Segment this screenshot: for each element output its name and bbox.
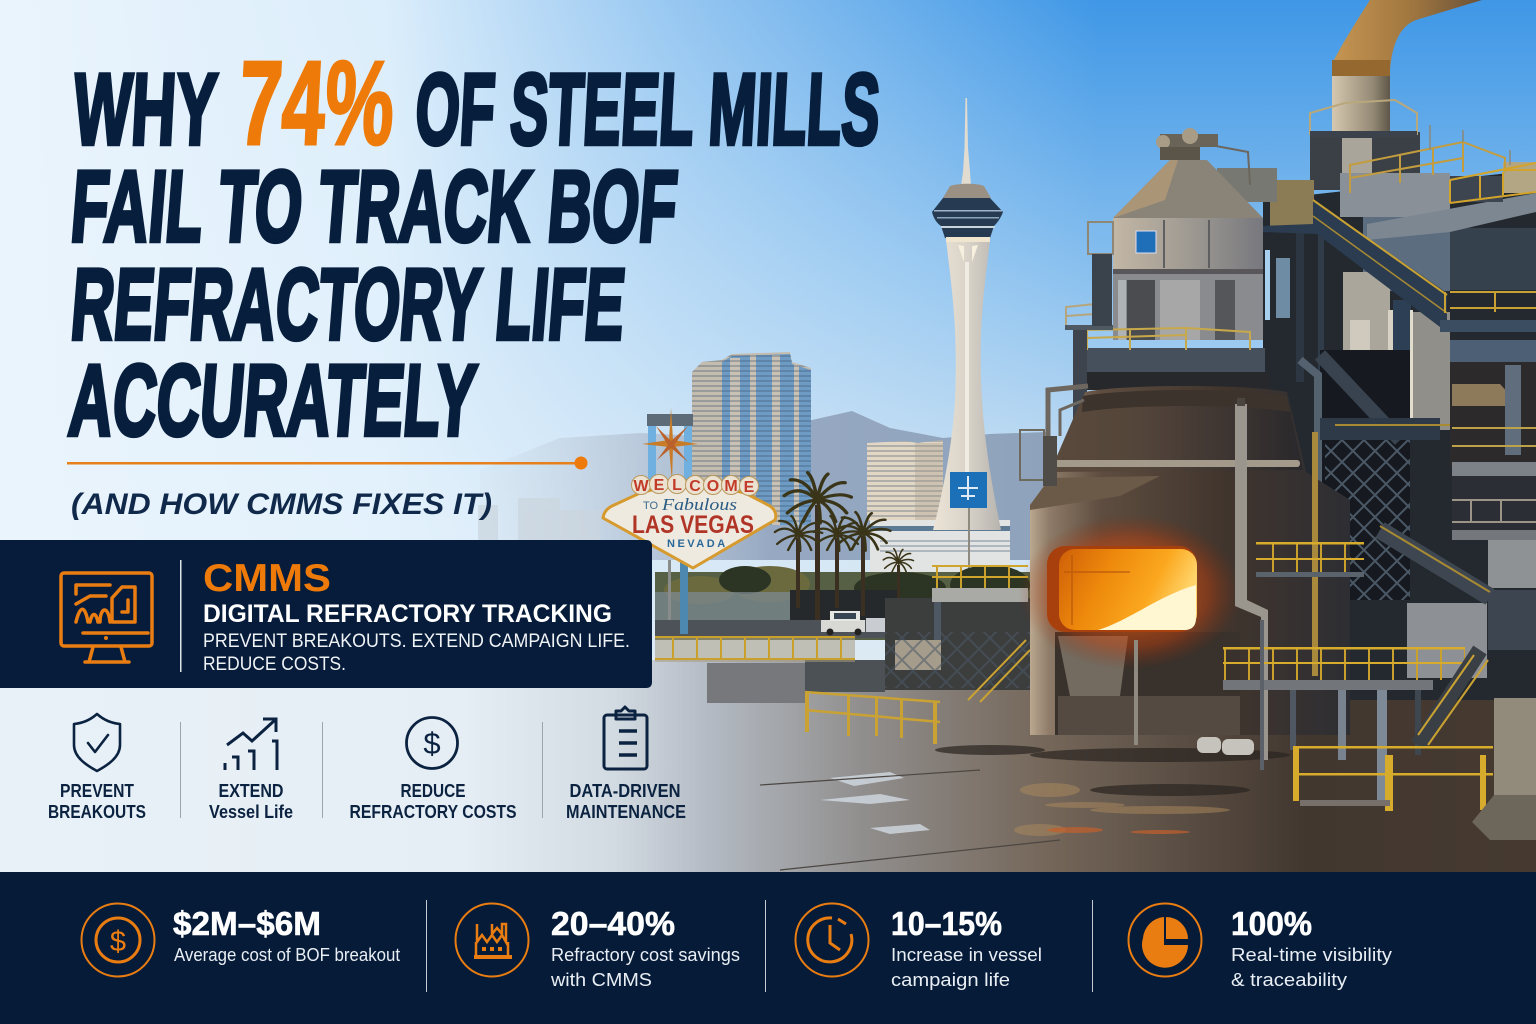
ground [0, 660, 1536, 872]
subtitle: (AND HOW CMMS FIXES IT) [71, 488, 492, 521]
title: WHY [71, 54, 220, 166]
Welcome to Las Vegas sign: M [724, 478, 738, 495]
Stratosphere tower [932, 98, 1003, 530]
dividers [180, 722, 543, 818]
BOF furnace vessel [1018, 386, 1350, 760]
benefit: prevent breakouts [48, 714, 146, 822]
furnace mouth [1047, 546, 1197, 632]
Welcome to Las Vegas sign: LAS VEGAS [632, 511, 754, 539]
connecting duct [1217, 168, 1277, 202]
upper ring [1113, 218, 1263, 274]
tagline: DIGITAL REFRACTORY TRACKING [203, 600, 612, 628]
Welcome to Las Vegas sign: C [689, 478, 701, 495]
high-rise hotel [692, 352, 811, 525]
stat: visibility [1128, 904, 1392, 990]
stat: campaign life: 10–15% [891, 905, 1002, 942]
top walls [1340, 173, 1450, 217]
sign post [680, 560, 688, 634]
wet reflections on ground [760, 745, 1290, 870]
faded background buildings [478, 498, 600, 540]
orange rule [67, 456, 588, 470]
stat: visibility: & traceability [1231, 970, 1347, 990]
exhaust duct and stack [1310, 0, 1482, 137]
glow around mouth [1018, 514, 1242, 670]
star [642, 408, 698, 482]
benefit: extend vessel life [209, 719, 293, 822]
cap cone [1113, 160, 1263, 218]
spire [961, 98, 971, 186]
panel: CMMS digital refractory tracking: REDUCE COSTS. [203, 654, 346, 675]
pod [932, 185, 1003, 238]
white truck [821, 611, 892, 636]
frame mass [1263, 170, 1536, 700]
tree line [655, 565, 1030, 640]
sky [0, 0, 1536, 660]
sky fade to the left [0, 0, 1100, 660]
stat: visibility: 100% [1231, 905, 1312, 942]
benefit: prevent breakouts: PREVENT [60, 781, 134, 801]
diamond board [603, 480, 776, 568]
dark truss stairs [1320, 350, 1410, 600]
WELCOME bulbs [632, 474, 758, 496]
icon: pie chart [1128, 904, 1202, 976]
Welcome to Las Vegas sign: E [744, 479, 755, 496]
highlighted 74%: 74% [236, 37, 398, 170]
vertical pipes [1235, 404, 1268, 760]
benefit: reduce refractory costs [350, 718, 516, 822]
open frame with sky gaps [1265, 250, 1270, 320]
title: FAIL TO TRACK BOF [67, 150, 681, 263]
benefit: reduce refractory costs: REFRACTORY COSTS [350, 802, 516, 822]
lower ring [1113, 274, 1263, 340]
deck behind [1270, 180, 1314, 226]
stat: breakout cost [82, 904, 400, 976]
vessel body [1030, 386, 1350, 735]
icon: monitor with chart [61, 573, 152, 662]
stat: campaign life: campaign life [891, 970, 1010, 990]
yellow walkway platform [1223, 542, 1488, 805]
blue billboard [950, 472, 987, 578]
Welcome to Las Vegas sign [603, 408, 776, 634]
title: ACCURATELY [65, 344, 480, 457]
Welcome to Las Vegas sign: L [672, 477, 682, 494]
benefit: extend vessel life: EXTEND [218, 781, 284, 801]
stat: cost savings: Refractory cost savings [551, 945, 740, 965]
silver back tower [1343, 272, 1390, 418]
top pipes [1156, 128, 1218, 160]
Welcome to Las Vegas sign: O [707, 478, 719, 495]
deck box [1503, 162, 1536, 193]
Welcome to Las Vegas sign: W [633, 478, 649, 495]
stat: cost savings [456, 904, 740, 990]
metal equipment box [1472, 698, 1536, 840]
pale tower behind sign [647, 414, 693, 486]
vessel cone [1050, 390, 1303, 472]
collar deck [1085, 348, 1265, 372]
icon: dollar circle: $ [423, 726, 441, 761]
icon: coin: $ [110, 926, 126, 958]
tower cluster under stack [1310, 132, 1420, 190]
steel frame structure [1262, 125, 1536, 700]
icon: clock [796, 904, 868, 976]
icon: shield [74, 714, 120, 771]
icon: coin [82, 904, 154, 976]
tan highlight band [1030, 476, 1160, 510]
pipe stubs on floor [1197, 737, 1254, 755]
tan wall [1413, 312, 1450, 430]
icon: factory [456, 904, 528, 976]
benefit: reduce refractory costs: REDUCE [400, 781, 466, 801]
Welcome to Las Vegas sign: Fabulous [661, 495, 737, 514]
benefit: data-driven maintenance [566, 707, 686, 822]
Welcome to Las Vegas sign: TO [643, 500, 659, 512]
description: PREVENT BREAKOUTS. EXTEND CAMPAIGN LIFE. [203, 631, 630, 652]
tan hotel [867, 440, 943, 521]
distant mountains [480, 411, 1060, 560]
stat: cost savings: 20–40% [551, 905, 675, 942]
shaft [933, 240, 1001, 530]
icon: clipboard [604, 707, 647, 769]
stat: breakout cost: Average cost of BOF breakout [174, 945, 400, 965]
benefit: prevent breakouts: BREAKOUTS [48, 802, 146, 822]
benefits row [48, 707, 686, 822]
lower vessel streaks [1055, 632, 1240, 735]
title [65, 37, 883, 457]
stat: visibility: Real-time visibility [1231, 945, 1392, 965]
upper walkway rails [1350, 142, 1505, 193]
stat: cost savings: with CMMS [550, 970, 652, 990]
silo with cap [1065, 128, 1277, 430]
stat: campaign life: Increase in vessel [891, 945, 1042, 965]
foreground railings and concrete [655, 636, 940, 744]
bottom stats band [0, 872, 1536, 1024]
right equipment [1450, 362, 1536, 467]
CMMS heading: CMMS [203, 557, 331, 600]
icon: dollar circle [406, 718, 458, 768]
benefit: data-driven maintenance: DATA-DRIVEN [570, 781, 680, 801]
stat: breakout cost: $2M–$6M [173, 905, 321, 942]
Welcome to Las Vegas sign: NEVADA [667, 538, 728, 550]
benefit: extend vessel life: Vessel Life [209, 802, 293, 822]
side platform left of furnace [885, 430, 1044, 702]
yellow floor railing [1293, 746, 1493, 811]
stairs [1262, 200, 1447, 327]
low white buildings [870, 520, 1010, 572]
Welcome to Las Vegas sign: E [654, 477, 665, 494]
icon: growth chart [225, 719, 277, 770]
stat: campaign life [796, 904, 1042, 990]
title: REFRACTORY LIFE [67, 248, 629, 361]
panel: CMMS digital refractory tracking [0, 540, 652, 688]
dividers [426, 900, 1093, 992]
title: OF STEEL MILLS [413, 54, 883, 166]
blue logo plate [1136, 231, 1156, 253]
divider [180, 560, 182, 672]
ring pipe [1050, 460, 1300, 467]
palm trees [775, 473, 913, 620]
benefit: data-driven maintenance: MAINTENANCE [566, 802, 686, 822]
stair rail [1445, 292, 1536, 313]
